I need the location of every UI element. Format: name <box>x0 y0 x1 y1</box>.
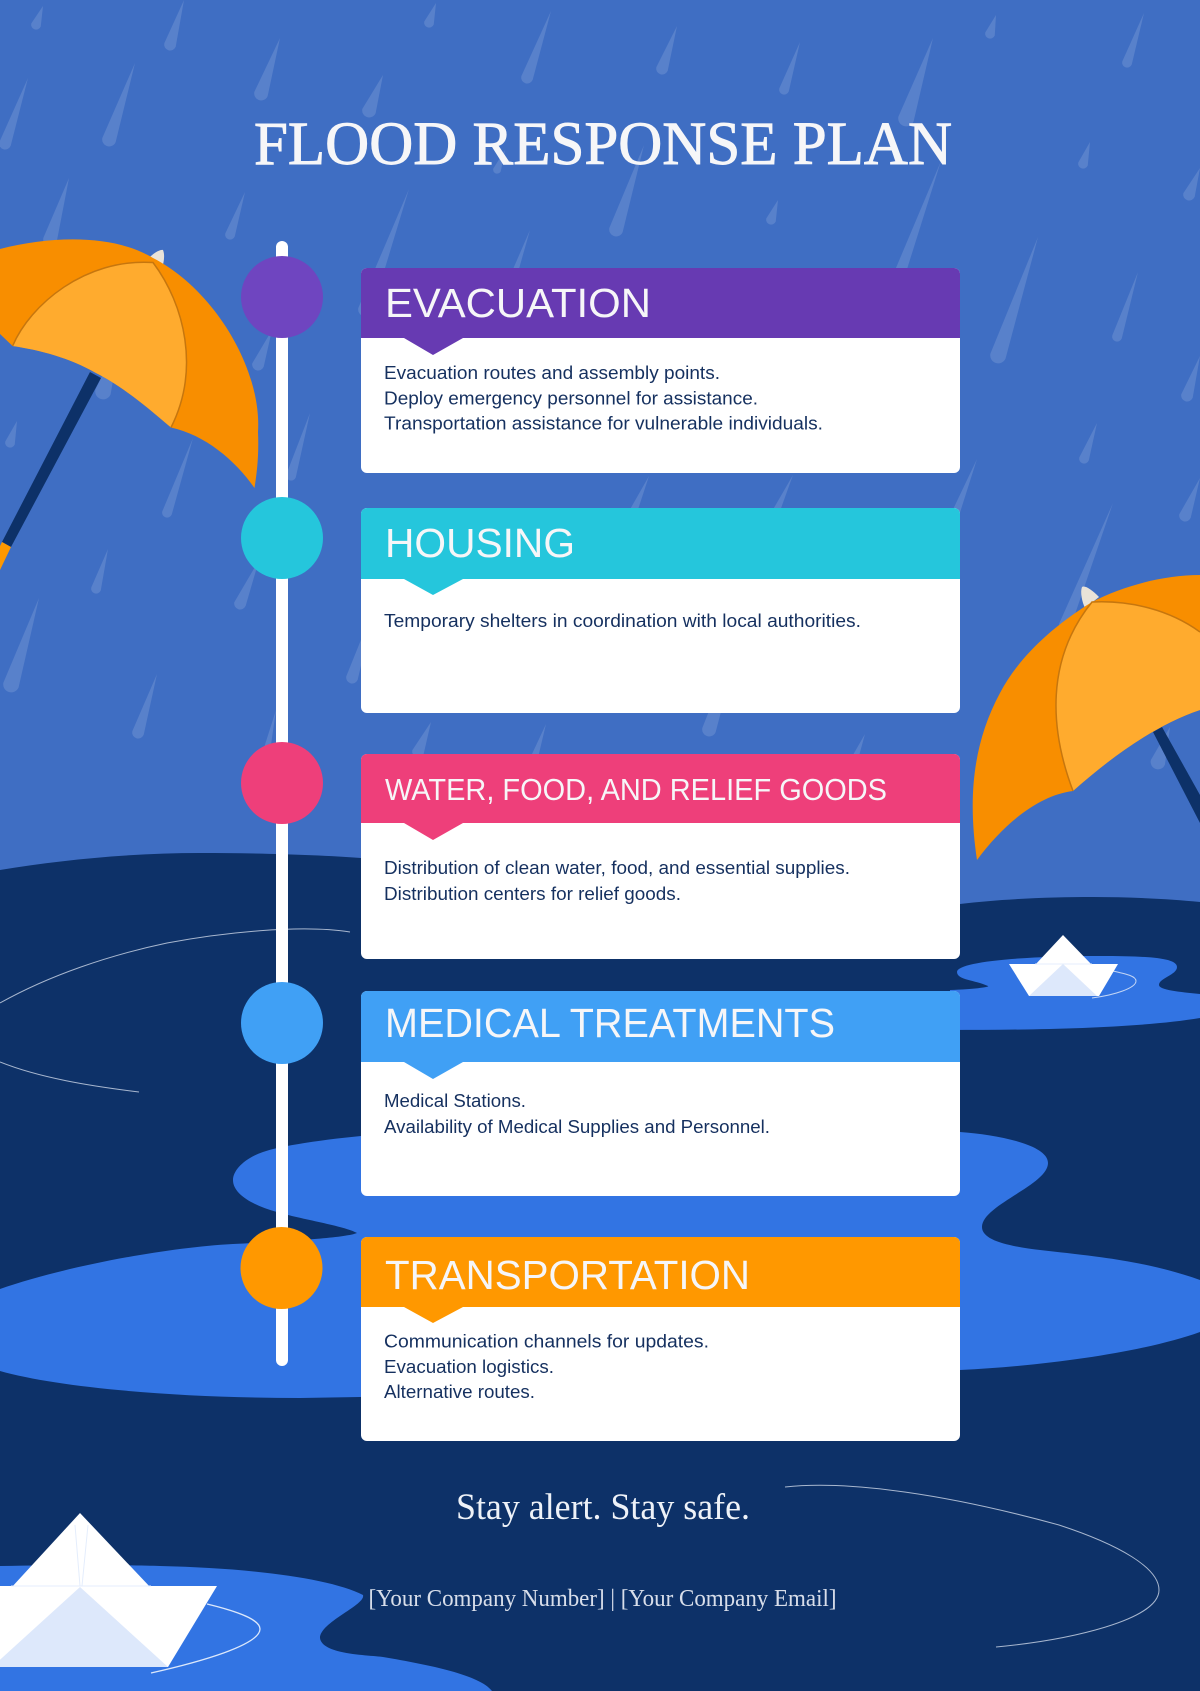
title: FLOOD RESPONSE PLAN <box>254 111 952 178</box>
panel: housing <box>361 508 960 713</box>
panel: water, food, relief goods: Distribution of clean water, food, and essential supplies. <box>384 858 850 878</box>
panel: medical treatments: MEDICAL TREATMENTS <box>385 1000 835 1046</box>
panel: water, food, relief goods: Distribution centers for relief goods. <box>384 884 681 904</box>
panel: medical treatments <box>361 991 960 1196</box>
panel: water, food, relief goods: WATER, FOOD, AND RELIEF GOODS <box>385 772 887 807</box>
panel: housing: HOUSING <box>385 520 575 566</box>
flood: dark water <box>0 853 1200 1691</box>
panel: water, food, relief goods <box>361 754 960 959</box>
panel: transportation: Alternative routes. <box>384 1382 535 1402</box>
tagline: Stay alert. Stay safe. <box>456 1487 750 1528</box>
panel: evacuation: Deploy emergency personnel for assistance. <box>384 388 758 408</box>
panel: medical treatments: Medical Stations. <box>384 1091 526 1111</box>
right flood pool <box>950 956 1200 1030</box>
right paper boat <box>1009 935 1136 998</box>
timeline <box>240 241 323 1366</box>
panel: transportation <box>361 1237 960 1441</box>
panel: housing: Temporary shelters in coordination with local authorities. <box>384 611 861 631</box>
panel: evacuation: EVACUATION <box>385 280 651 326</box>
panel: transportation: Communication channels for updates. <box>384 1332 709 1352</box>
left umbrella <box>0 239 258 570</box>
panel: evacuation: Evacuation routes and assembly points. <box>384 363 720 383</box>
bottom-left flood pool <box>0 1565 492 1691</box>
panel: medical treatments: Availability of Medical Supplies and Personnel. <box>384 1117 770 1137</box>
right umbrella <box>973 575 1200 860</box>
contact line: [Your Company Number] | [Your Company Email] <box>368 1586 836 1612</box>
panel: evacuation <box>361 268 960 473</box>
bottom-left paper boat <box>0 1513 260 1673</box>
central flood pool <box>0 1132 1200 1398</box>
water ripples <box>0 929 1159 1647</box>
panel: evacuation: Transportation assistance for vulnerable individuals. <box>384 414 823 434</box>
rain drops <box>0 0 1200 786</box>
panel: transportation: Evacuation logistics. <box>384 1357 554 1377</box>
panel: transportation: TRANSPORTATION <box>385 1252 750 1298</box>
